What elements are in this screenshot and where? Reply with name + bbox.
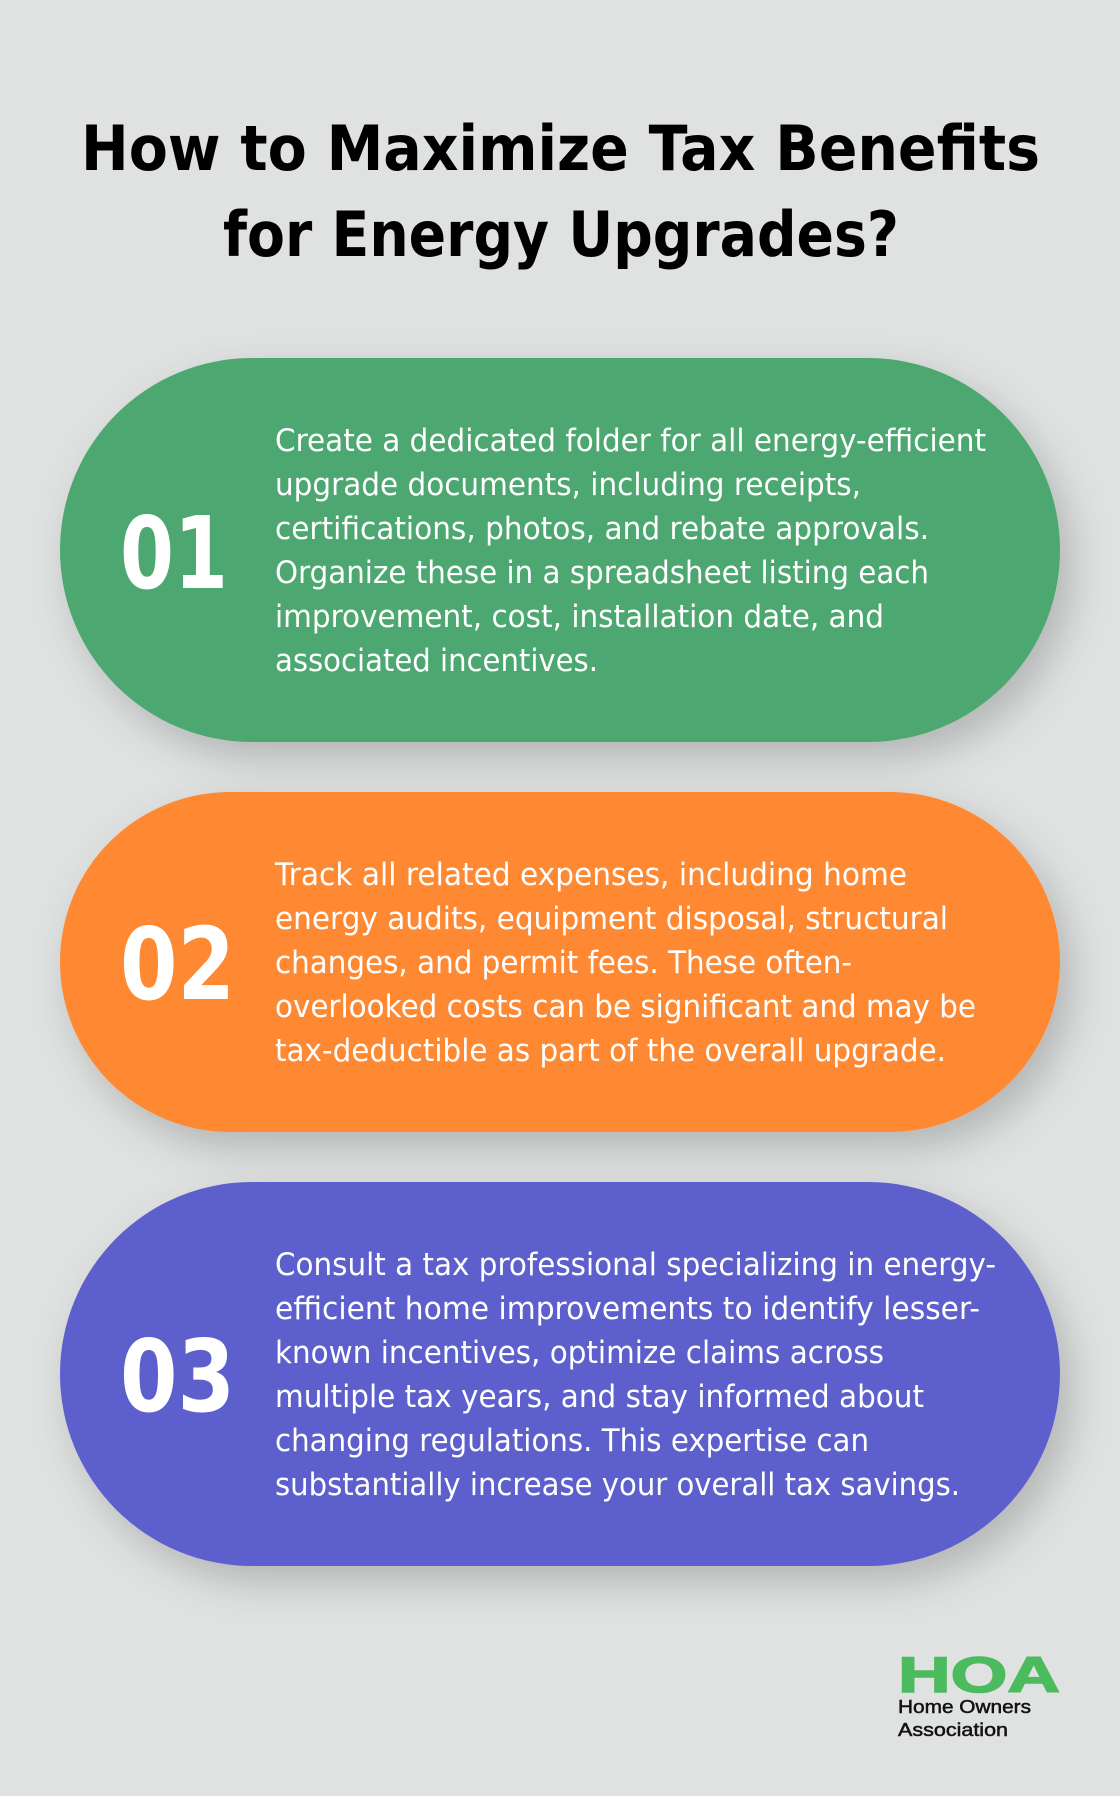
text: step 02 description — [274, 857, 976, 1069]
title — [81, 112, 1040, 271]
panel: step 02 — [60, 792, 1060, 1132]
logo: HOA Home Owners Association: Association — [898, 1719, 1008, 1740]
title: How to Maximize Tax Benefits — [81, 112, 1040, 185]
text: step 02 description: tax-deductible as part of the overall upgrade. — [275, 1033, 946, 1069]
number 03: 03 — [120, 1318, 235, 1435]
text: step 02 description: Track all related expenses, including home — [274, 857, 907, 893]
text: step 03 description: efficient home improvements to identify lesser- — [275, 1291, 980, 1327]
text: step 02 description: overlooked costs can be significant and may be — [275, 989, 976, 1025]
logo: HOA Home Owners Association: HOA — [898, 1647, 1060, 1703]
panel: step 01 — [60, 358, 1060, 742]
panel: step 03 — [60, 1182, 1060, 1566]
number 02: 02 — [120, 906, 235, 1023]
logo: HOA Home Owners Association — [898, 1647, 1060, 1740]
text: step 01 description: associated incentives. — [275, 643, 598, 679]
text: step 03 description: known incentives, optimize claims across — [275, 1335, 884, 1371]
text: step 02 description: changes, and permit fees. These often- — [275, 945, 852, 981]
text: step 01 description: Organize these in a spreadsheet listing each — [275, 555, 929, 591]
logo: HOA Home Owners Association: Home Owners — [898, 1696, 1031, 1717]
text: step 03 description: changing regulations. This expertise can — [275, 1423, 869, 1459]
text: step 01 description — [275, 423, 986, 679]
text: step 01 description: certifications, photos, and rebate approvals. — [275, 511, 929, 547]
text: step 03 description: Consult a tax professional specializing in energy- — [275, 1247, 996, 1283]
text: step 03 description — [275, 1247, 996, 1503]
text: step 02 description: energy audits, equipment disposal, structural — [275, 901, 948, 937]
text: step 03 description: substantially increase your overall tax savings. — [275, 1467, 960, 1503]
text: step 01 description: improvement, cost, installation date, and — [275, 599, 884, 635]
text: step 01 description: Create a dedicated folder for all energy-efficient — [275, 423, 986, 459]
text: step 03 description: multiple tax years, and stay informed about — [275, 1379, 924, 1415]
text: step 01 description: upgrade documents, including receipts, — [275, 467, 861, 503]
number 01: 01 — [120, 495, 228, 612]
title: for Energy Upgrades? — [223, 198, 899, 271]
